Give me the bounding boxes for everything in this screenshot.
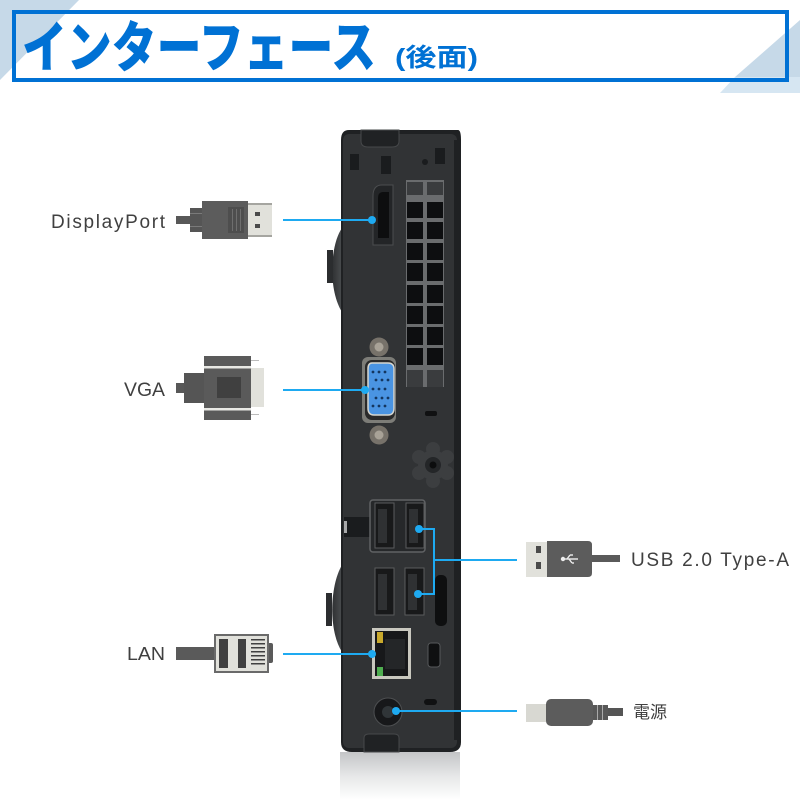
icon: USB plug [526, 541, 620, 577]
line: USB [418, 529, 517, 594]
chassis [341, 130, 461, 752]
power jack [374, 698, 402, 726]
small lock slot [425, 411, 437, 416]
icon: DisplayPort plug [176, 201, 272, 239]
connector dots [361, 216, 423, 715]
label: LAN: LAN [127, 644, 165, 664]
icon: VGA plug [176, 356, 264, 420]
label: power: 電源 [633, 703, 667, 722]
icon: power plug [526, 699, 623, 726]
top notch [361, 130, 399, 147]
heading suffix: (後面) [395, 44, 478, 72]
thumb screw [412, 442, 454, 488]
bottom notch [364, 734, 399, 752]
line: DisplayPort [283, 219, 372, 221]
title panel [14, 12, 787, 80]
security slot [428, 643, 440, 667]
side latch [435, 575, 447, 626]
header background: top-left triangle [0, 0, 79, 80]
line: LAN [283, 653, 372, 655]
line: power [396, 710, 517, 712]
label: USB 2.0 Type-A: USB 2.0 Type-A [631, 550, 789, 571]
label: VGA: VGA [124, 380, 165, 401]
computer rear view [326, 130, 461, 752]
VGA socket [362, 338, 396, 444]
USB sockets [370, 500, 425, 615]
icon: LAN plug [176, 635, 273, 672]
top slots [350, 148, 445, 174]
connector lines [283, 220, 517, 711]
side stands [326, 228, 342, 652]
lower lock [424, 699, 437, 705]
side tab [344, 517, 370, 537]
heading: インターフェース [22, 17, 376, 79]
vents [406, 180, 444, 387]
LAN socket [372, 628, 411, 679]
USB symbol [562, 555, 578, 563]
label: DisplayPort: DisplayPort [51, 212, 166, 233]
line: VGA [283, 389, 365, 391]
DisplayPort socket [373, 185, 393, 245]
header background: bottom-right triangle [720, 20, 800, 93]
computer reflection [340, 752, 460, 800]
